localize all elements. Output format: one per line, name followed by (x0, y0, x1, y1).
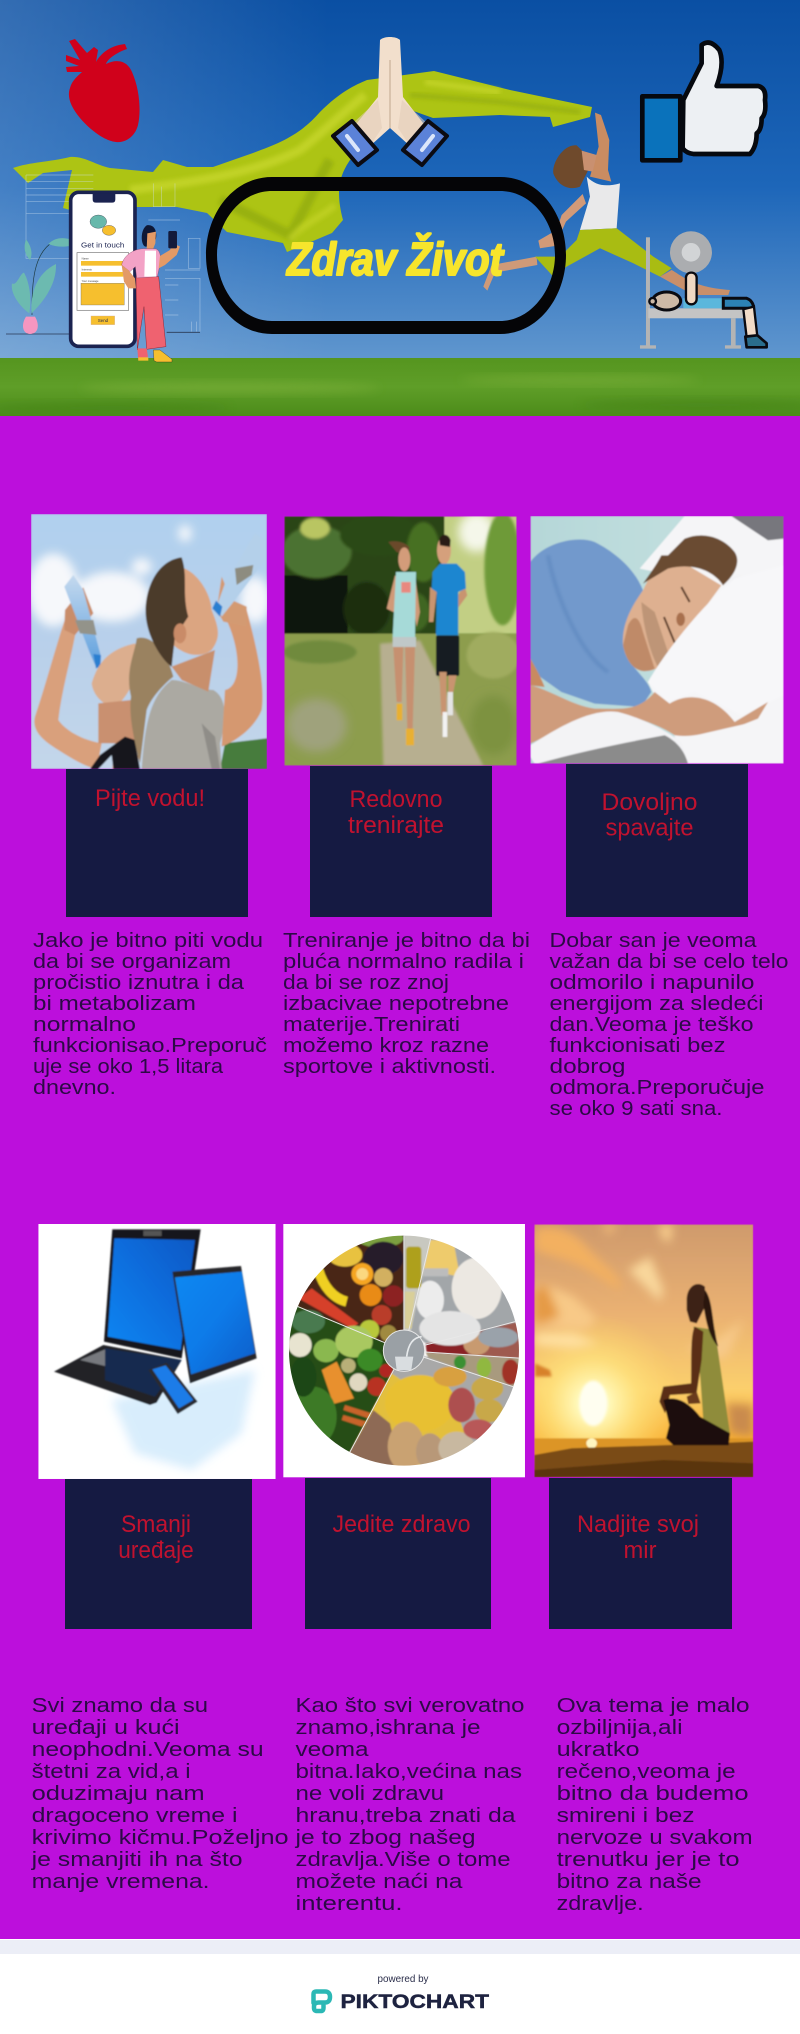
phone illustration with woman and plant (6, 175, 200, 362)
card label: Dovoljno spavajte: spavajte (606, 814, 694, 842)
text block: food: zdravlja.Više o tome (296, 1849, 510, 1871)
text block: sleep: Dobar san je veoma (550, 930, 758, 952)
text block: peace of mind: zdravlje. (557, 1893, 644, 1915)
female runner (388, 541, 409, 555)
raised arm (590, 113, 611, 182)
centre water glass (383, 1330, 425, 1371)
phone body (71, 192, 135, 346)
hair and face (553, 145, 590, 188)
form box (77, 253, 129, 310)
dairy wedge (411, 1227, 533, 1346)
green trousers (535, 228, 672, 277)
phone (148, 1363, 198, 1414)
text block: peace of mind: trenutku jer je to (557, 1849, 740, 1871)
text block: water: funkcionisao.Preporuč (33, 1035, 267, 1057)
text block: peace of mind: smireni i bez (557, 1805, 695, 1827)
card label: Redovno trenirajte: trenirajte (348, 812, 444, 839)
card label: Nadjite svoj mir: mir (624, 1537, 656, 1564)
text block: food: je to zbog našeg (294, 1827, 476, 1849)
field labels: Name (82, 257, 89, 261)
meat and fish wedge (426, 1320, 522, 1358)
text block: sleep: funkcionisati bez (550, 1035, 726, 1057)
text block: sleep: odmorilo i napunilo (550, 972, 754, 994)
powered by text: powered by (378, 1973, 429, 1985)
text block: water: pročistio iznutra i da (33, 972, 245, 994)
card label: Jedite zdravo: Jedite zdravo (332, 1511, 470, 1538)
text block: sleep: važan da bi se celo telo (550, 951, 788, 973)
pill frame (206, 177, 566, 334)
hero banner (0, 0, 800, 416)
text block: water: bi metabolizam (33, 993, 196, 1015)
notch (93, 193, 115, 203)
text block: water (33, 930, 267, 1099)
text block: sleep (550, 930, 788, 1120)
text block: water: normalno (33, 1014, 136, 1036)
vegetable wedge (287, 1302, 404, 1480)
text block: training: možemo kroz razne (283, 1035, 489, 1057)
grains and potatoes wedge (330, 1351, 527, 1480)
back leg (483, 257, 537, 291)
silhouette (659, 1284, 730, 1445)
photo: meditating woman at sunset (503, 1224, 753, 1493)
title: Zdrav Život (285, 233, 504, 285)
purple page background lower (0, 939, 800, 1939)
phone illustration with woman and plant: Interests (82, 268, 93, 272)
tablet (172, 1266, 257, 1383)
text block: devices: oduzimaju nam (32, 1783, 205, 1805)
text block: sleep: se oko 9 sati sna. (550, 1098, 722, 1120)
standing woman (122, 225, 180, 362)
text block: food (294, 1695, 524, 1915)
wedge separators (290, 1227, 522, 1455)
singlet (580, 177, 620, 230)
photo: couple drinking water (28, 514, 270, 769)
icon: thumbs up (642, 43, 765, 160)
text block: peace of mind: nervoze u svakom (557, 1827, 753, 1849)
text block: water: uje se oko 1,5 litara (33, 1056, 224, 1078)
legumes strip (426, 1353, 522, 1387)
male runner (437, 536, 451, 564)
card label: Jedite zdravo (305, 1478, 491, 1629)
text block: devices: štetni za vid,a i (32, 1761, 191, 1783)
footer white area (0, 1954, 800, 2034)
flowing green fabric (13, 71, 592, 252)
text block: devices: dragoceno vreme i (32, 1805, 238, 1827)
laptop base (54, 1345, 182, 1405)
card label: Smanji uređaje: uređaje (118, 1537, 194, 1564)
send button: Send (98, 318, 109, 323)
card label: Dovoljno spavajte: Dovoljno (602, 789, 698, 816)
reaching arm (538, 194, 586, 248)
text block: training: da bi se roz znoj (283, 972, 449, 994)
text block: sleep: dobrog (550, 1056, 626, 1078)
text block: training: materije.Trenirati (283, 1014, 460, 1036)
icon: Piktochart logo mark (314, 1992, 330, 2011)
photo: laptop, tablet and phone (38, 1224, 276, 1479)
form fields (81, 261, 123, 266)
icon: bench press (640, 231, 767, 349)
text block: devices: neophodni.Veoma su (32, 1739, 264, 1761)
floor line (6, 332, 200, 334)
text block: food: možete naći na (296, 1871, 464, 1893)
text block: peace of mind: Ova tema je malo (557, 1695, 750, 1717)
text block: devices: je smanjiti ih na što (30, 1849, 243, 1871)
text block: training: sportove i aktivnosti. (283, 1056, 496, 1078)
text block: sleep: energijom za sledeći (550, 993, 764, 1015)
text block: water: da bi se organizam (33, 951, 231, 973)
text block: training: izbacivae nepotrebne (283, 993, 509, 1015)
text block: food: veoma (296, 1739, 370, 1761)
card label: Smanji uređaje (65, 1479, 252, 1629)
card label: Dovoljno spavajte (566, 764, 748, 917)
card label: Nadjite svoj mir (549, 1478, 732, 1629)
form heading: Get in touch (81, 240, 124, 249)
chat bubbles (90, 215, 107, 228)
card label: Pijte vodu (66, 769, 248, 917)
text block: devices: uređaji u kući (32, 1717, 180, 1739)
send button (91, 316, 115, 325)
text block: peace of mind (557, 1695, 753, 1915)
text block: food: znamo,ishrana je (296, 1717, 480, 1739)
oil wedge (404, 1227, 433, 1332)
front leg (660, 270, 730, 295)
text block: peace of mind: ozbiljnija,ali (557, 1717, 683, 1739)
text block: devices: Svi znamo da su (32, 1695, 208, 1717)
line-art background (26, 175, 200, 332)
text block: food: ne voli zdravu (296, 1783, 444, 1805)
text block: devices: manje vremena. (32, 1871, 210, 1893)
text block: peace of mind: ukratko (557, 1739, 640, 1761)
text block: water: Jako je bitno piti vodu (33, 930, 263, 952)
text block: sleep: odmora.Preporučuje (550, 1077, 764, 1099)
plant (12, 238, 70, 334)
photo: food wheel (283, 1224, 533, 1480)
text block: sleep: dan.Veoma je teško (550, 1014, 754, 1036)
left cuff (333, 121, 377, 165)
photo: man sleeping (530, 516, 784, 764)
grass (0, 358, 800, 416)
text block: training (283, 930, 530, 1078)
card label: Redovno trenirajte (310, 766, 492, 917)
footer band (0, 1940, 800, 1954)
text block: peace of mind: bitno za naše (557, 1871, 702, 1893)
text block: training: pluća normalno radila i (283, 951, 524, 973)
text block: food: interentu. (296, 1893, 402, 1915)
purple page background (0, 415, 800, 939)
text block: peace of mind: rečeno,veoma je (557, 1761, 736, 1783)
text block: devices (30, 1695, 289, 1893)
card label: Nadjite svoj mir: Nadjite svoj (577, 1511, 699, 1538)
fruit wedge (287, 1227, 404, 1351)
text block: food: bitna.Iako,većina nas (296, 1761, 522, 1783)
icon: praying hands (333, 37, 447, 165)
sky (0, 0, 800, 372)
text block: food: Kao što svi verovatno (296, 1695, 524, 1717)
icon: anatomical heart (66, 39, 140, 142)
card label: Redovno trenirajte: Redovno (350, 786, 442, 813)
text block: water: dnevno. (33, 1077, 116, 1099)
Piktochart wordmark: PIKTOCHART (340, 1991, 489, 2013)
laptop lid (104, 1229, 201, 1358)
jumping woman (483, 113, 730, 295)
text block: devices: krivimo kičmu.Poželjno (32, 1827, 289, 1849)
card label: Pijte vodu: Pijte vodu! (95, 785, 205, 812)
right cuff (403, 121, 447, 165)
text block: peace of mind: bitno da budemo (557, 1783, 749, 1805)
photo: couple running (282, 512, 521, 766)
phone illustration with woman and plant: Your message (82, 279, 99, 283)
card label: Smanji uređaje: Smanji (121, 1511, 191, 1538)
text block: food: hranu,treba znati da (296, 1805, 517, 1827)
text block: training: Treniranje je bitno da bi (283, 930, 530, 952)
